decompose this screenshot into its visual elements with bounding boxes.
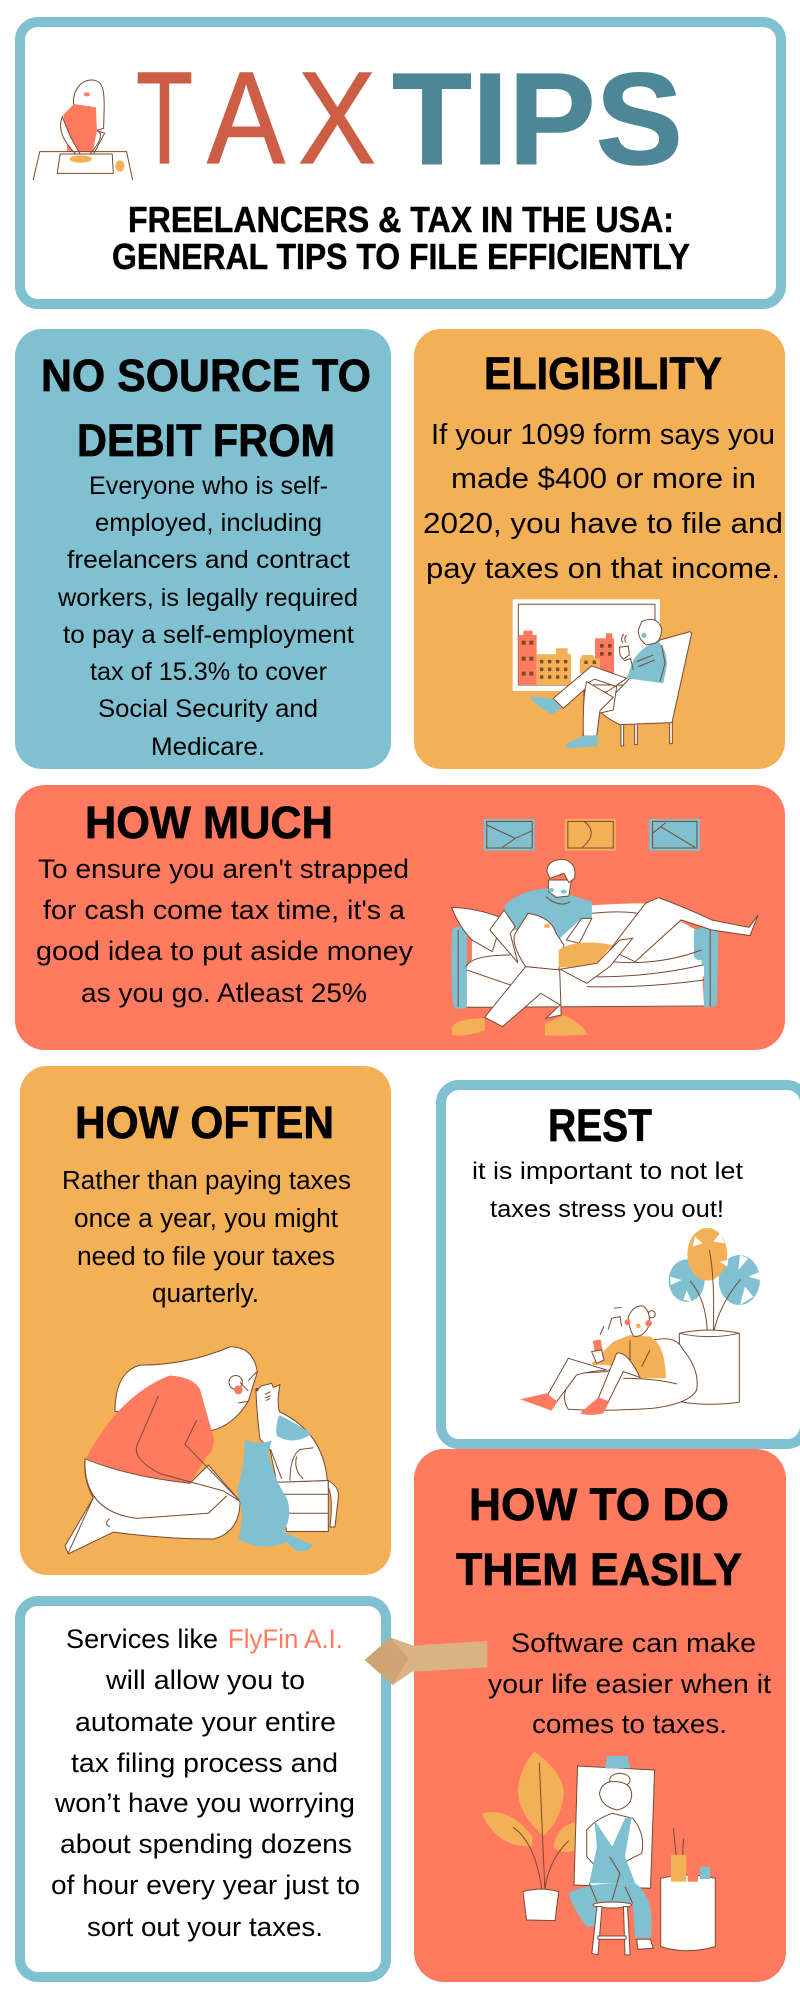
text: FlyFin A.I. automation: about spending dozens: [60, 1829, 352, 1859]
text: self-employment tax: to pay a self-employment: [63, 621, 354, 649]
text: FlyFin A.I. automation: won’t have you worrying: [54, 1788, 355, 1818]
text: put aside money: as you go. Atleast 25%: [81, 978, 367, 1008]
text: self-employment tax: tax of 15.3% to cover: [90, 658, 327, 686]
text: do not stress: taxes stress you out!: [490, 1196, 724, 1223]
text: software makes it easier: comes to taxes.: [532, 1709, 727, 1739]
text: put aside money: good idea to put aside money: [36, 936, 414, 966]
panel: eligibility: [414, 329, 785, 769]
heading: TAX: A: [207, 44, 286, 191]
text: do not stress: [472, 1158, 743, 1223]
panel: rest: [441, 1085, 800, 1444]
text: quarterly filing: [62, 1167, 351, 1308]
panel: how to do them easily: [414, 1449, 786, 1982]
text: quarterly filing: need to file your taxes: [77, 1243, 335, 1271]
text: self-employment tax: Social Security and: [98, 695, 318, 723]
heading: how much: HOW MUCH: [85, 797, 333, 848]
text: put aside money: [36, 854, 414, 1008]
heading: TAX: T: [136, 44, 193, 191]
subtitle: GENERAL TIPS TO FILE EFFICIENTLY: [112, 236, 690, 277]
panel: how much: [15, 785, 785, 1050]
heading: no source to debit from: [41, 350, 371, 466]
text: eligibility rule: 2020, you have to file and: [423, 508, 783, 540]
icon: woman painting with plant: [482, 1752, 715, 1955]
heading: how to do them easily: HOW TO DO: [469, 1479, 729, 1530]
text: FlyFin A.I. automation: sort out your taxes.: [87, 1912, 323, 1942]
heading: rest: REST: [548, 1100, 652, 1151]
icon: couple on sofa with wall frames: [451, 819, 758, 1036]
text: self-employment tax: workers, is legally required: [57, 584, 358, 612]
heading: eligibility: ELIGIBILITY: [484, 348, 722, 399]
text: FlyFin A.I. automation: [51, 1624, 360, 1942]
panel: how often: [20, 1066, 391, 1575]
text: software makes it easier: Software can make: [511, 1628, 756, 1658]
heading: no source to debit from: NO SOURCE TO: [41, 350, 371, 401]
text: FlyFin A.I. automation: tax filing process and: [71, 1748, 338, 1778]
heading: TAX: [136, 44, 376, 191]
text: put aside money: for cash come tax time, it's a: [43, 895, 406, 925]
text: FlyFin A.I. automation: Services like: [66, 1624, 218, 1654]
text: eligibility rule: pay taxes on that income.: [426, 553, 780, 585]
text: put aside money: To ensure you aren't strapped: [38, 854, 409, 884]
text: self-employment tax: freelancers and contract: [67, 546, 350, 574]
text: software makes it easier: your life easier when it: [488, 1669, 772, 1699]
text: FlyFin A.I. automation: of hour every year just to: [51, 1870, 360, 1900]
heading: TAX: X: [298, 44, 376, 191]
text: software makes it easier: [488, 1628, 772, 1739]
icon: man with coffee in armchair: [513, 599, 691, 749]
text: FlyFin A.I. automation: will allow you to: [105, 1665, 305, 1695]
icon: man relaxing with headphones and plant: [520, 1228, 760, 1415]
subtitle: [112, 199, 690, 277]
text: quarterly filing: Rather than paying taxes: [62, 1167, 351, 1195]
panel: no source to debit from: [15, 329, 391, 769]
text: FlyFin A.I. automation: automate your entire: [75, 1707, 336, 1737]
arrow: paper arrow from software to services: [365, 1637, 487, 1685]
text: self-employment tax: [57, 472, 358, 761]
heading: how to do them easily: THEM EASILY: [456, 1544, 742, 1595]
text: FlyFin A.I. automation: FlyFin A.I.: [228, 1624, 343, 1654]
panel: title: [20, 22, 781, 304]
text: eligibility rule: [423, 419, 783, 585]
text: eligibility rule: made $400 or more in: [451, 463, 756, 495]
subtitle: FREELANCERS & TAX IN THE USA:: [128, 199, 674, 240]
heading: how often: HOW OFTEN: [75, 1097, 334, 1148]
heading: how to do them easily: [456, 1479, 742, 1595]
heading: TIPS: TIPS: [392, 45, 683, 192]
text: quarterly filing: once a year, you might: [74, 1205, 338, 1233]
text: eligibility rule: If your 1099 form says you: [431, 419, 775, 451]
text: self-employment tax: Medicare.: [151, 733, 265, 761]
icon: woman with two cats: [65, 1347, 339, 1554]
icon: woman cutting fruit: [33, 80, 133, 180]
text: quarterly filing: quarterly.: [152, 1280, 259, 1308]
heading: no source to debit from: DEBIT FROM: [77, 415, 335, 466]
panel: services like FlyFin: [20, 1601, 386, 1977]
text: self-employment tax: employed, including: [95, 509, 322, 537]
text: self-employment tax: Everyone who is self-: [89, 472, 328, 500]
text: do not stress: it is important to not let: [472, 1158, 743, 1185]
